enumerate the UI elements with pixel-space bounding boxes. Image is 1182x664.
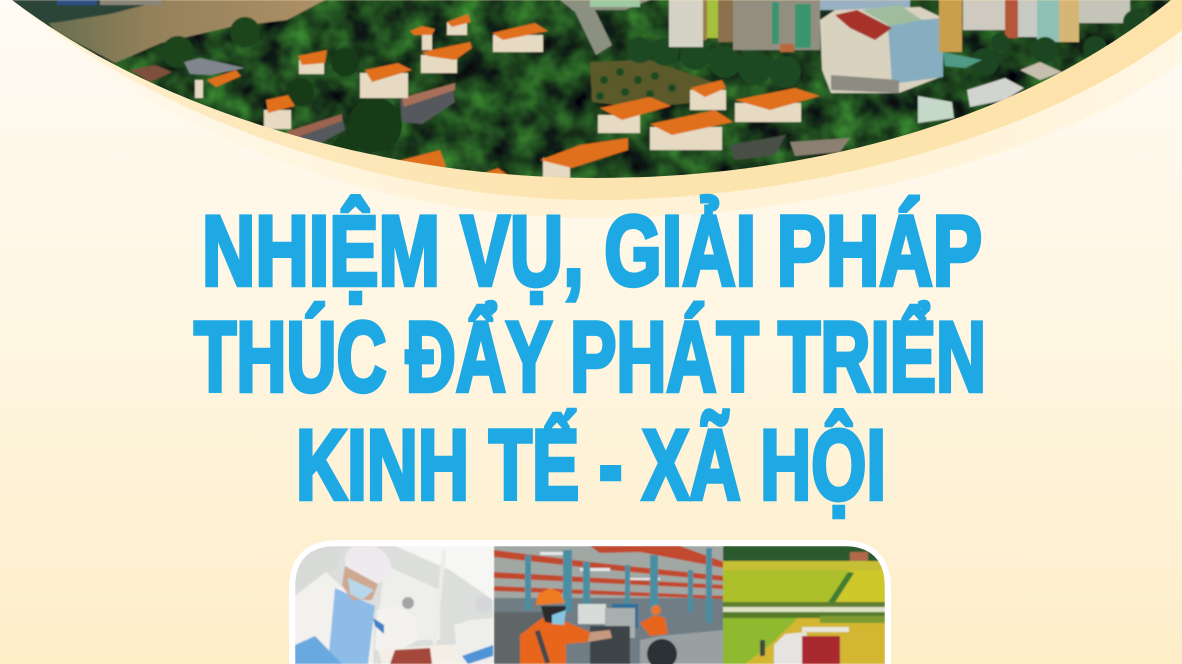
hero photo: riverside town — [0, 0, 1182, 180]
decorative curved band: golden — [12, 0, 1182, 200]
orange roofs — [207, 14, 820, 178]
title line 3: KINH TẾ - XÃ HỘI — [296, 409, 886, 520]
low rooftops — [918, 96, 954, 123]
hedge behind orchard — [627, 37, 801, 88]
title — [194, 195, 986, 520]
decorative curved band: light — [40, 0, 1182, 218]
trees in front of right buildings — [971, 10, 1147, 76]
lower road — [298, 118, 346, 143]
photo: rice fields — [723, 546, 885, 664]
photo: food processing — [295, 537, 493, 664]
photo card: three sector photos — [295, 537, 885, 664]
left houses: grey and brown roofs — [184, 58, 245, 75]
photo card frame — [289, 540, 891, 664]
photo: factory — [494, 546, 724, 664]
upper road — [400, 88, 455, 124]
light ground and pale roof — [560, 0, 650, 55]
orchard field — [590, 60, 718, 108]
dark tree clumps — [286, 48, 402, 164]
house walls — [195, 22, 801, 178]
river — [30, 0, 325, 63]
far bank and dock — [10, 0, 165, 24]
bank trees — [162, 17, 260, 68]
apartment blocks — [669, 0, 1130, 93]
